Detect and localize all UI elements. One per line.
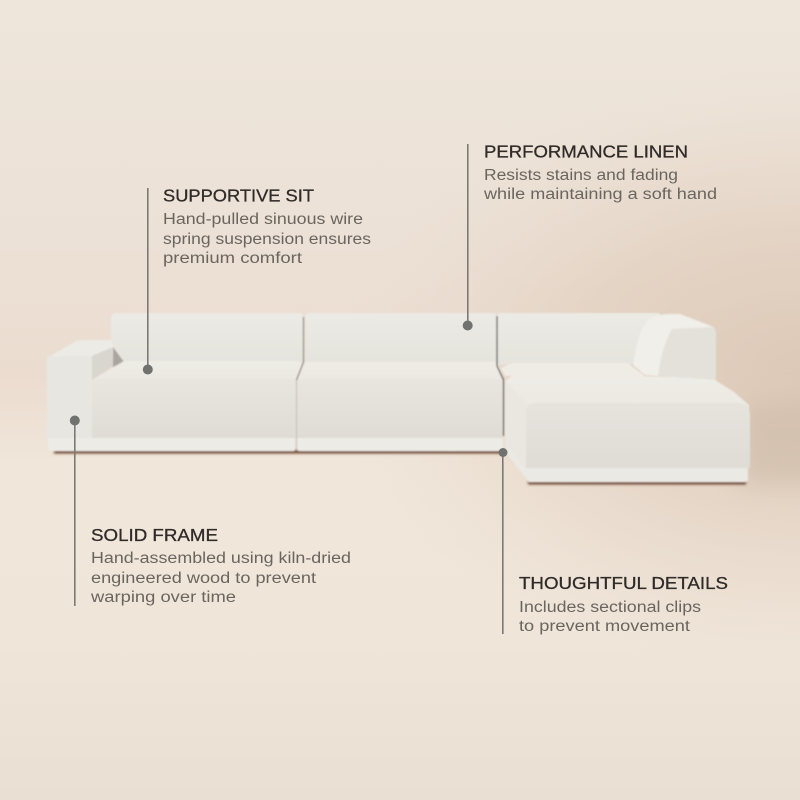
right module <box>497 313 750 482</box>
sofa <box>47 313 750 484</box>
leader line and dot <box>143 188 153 374</box>
heading: SUPPORTIVE SIT <box>163 186 314 206</box>
callout: solid frame <box>70 416 351 606</box>
heading: THOUGHTFUL DETAILS <box>519 573 728 593</box>
description: Hand-pulled sinuous wire <box>163 211 363 228</box>
callout: performance linen <box>463 142 717 330</box>
description: premium comfort <box>163 250 303 267</box>
heading: PERFORMANCE LINEN <box>484 142 688 162</box>
description: spring suspension ensures <box>163 231 371 248</box>
leader line and dot <box>70 416 80 606</box>
description: to prevent movement <box>519 618 691 635</box>
description: Includes sectional clips <box>519 599 701 616</box>
description: warping over time <box>90 589 236 606</box>
leader line and dot <box>463 144 473 330</box>
callout: supportive sit <box>143 186 371 374</box>
left module <box>47 313 303 451</box>
description: Resists stains and fading <box>484 167 678 184</box>
leader line and dot <box>498 448 508 634</box>
description: Hand-assembled using kiln-dried <box>91 550 351 567</box>
callout: thoughtful details <box>498 448 728 635</box>
floor shadows <box>54 450 746 484</box>
description: engineered wood to prevent <box>91 570 317 587</box>
heading: SOLID FRAME <box>91 525 218 545</box>
middle module <box>296 313 504 451</box>
description: while maintaining a soft hand <box>483 186 717 203</box>
